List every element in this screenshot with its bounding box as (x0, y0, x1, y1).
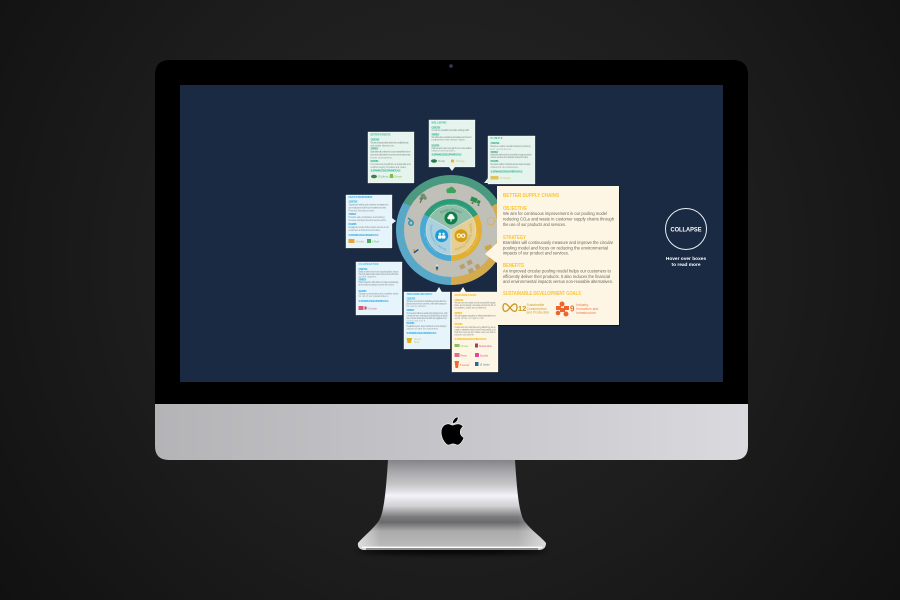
panel: better farming: Our customers benefit from a sustainable and (370, 163, 411, 166)
panel: better farming: forest ecosystems. (370, 156, 393, 160)
panel: zero harm and safety: Healthier teams, fewer incidents and a stronger (406, 325, 447, 328)
benefits block (503, 263, 613, 284)
panel: communities lower left: Stronger communities and a resilient sector (358, 292, 399, 296)
panel: zero harm and safety: for every worker. (406, 305, 427, 308)
panel: communities lower left: Work together with others to share knowledge (358, 281, 399, 284)
icon: tree (447, 214, 455, 222)
sdg 12: and Production (526, 311, 549, 315)
panel: zero harm and safety: Achieve a zero-harm workplace across all of our (406, 300, 447, 303)
objective block: OBJECTIVE (503, 206, 527, 212)
panel: zero harm and safety: site, and we share lessons with our suppliers and (406, 317, 447, 320)
sdg 9: Infrastructure (576, 311, 596, 315)
benefits block: efficiently deliver their products. It also reduces the financial (503, 274, 610, 279)
sdg icons: 7 Energy (456, 160, 466, 163)
panel: better farming: SUSTAINABLE DEVELOPMENT GOALS (370, 170, 401, 172)
camera (449, 64, 453, 68)
outer ring: green (407, 179, 495, 204)
panel: responsible sourcing: that their own supply chains carry less risk to (454, 331, 496, 334)
sdg icon: Decent (414, 338, 422, 341)
sdg icons (454, 344, 492, 368)
ring labels: Sustainable Forests · Wellbeing · Climate (434, 203, 468, 210)
panel: better climate right: OBJECTIVE (490, 142, 500, 145)
sector: better supply chains: Better Supply Chains (455, 224, 472, 250)
sdg icons: Climate (460, 345, 469, 348)
hint text: Hover over boxes (666, 256, 706, 262)
icon: teal gear (408, 218, 413, 225)
objective block: the use of our products and services. (503, 222, 566, 227)
panel: zero harm and safety: OBJECTIVE (406, 298, 416, 300)
panel: better farming: BETTER FORESTS (370, 134, 391, 136)
panel: responsible sourcing: We aim for zero waste and a responsible supply (454, 302, 496, 304)
icon: linked gears (457, 234, 465, 237)
sdg icons: 3 Health (356, 240, 365, 244)
panel heading: BETTER SUPPLY CHAINS (503, 193, 559, 199)
panel: better farming (368, 132, 415, 184)
panel: healthy environment: Engaged people deliver better service to all (348, 226, 389, 229)
panel: better climate: Our aim is a healthier and safer working world. (432, 129, 470, 132)
panel: better farming: STRATEGY (370, 148, 379, 150)
sdg 12: 12 (518, 304, 526, 313)
icon: person (436, 264, 438, 271)
panel: better climate: Partners and customers gain from a more resilient (432, 147, 472, 150)
panel: better farming: certified supply of pallets and crates. (370, 166, 407, 169)
panel: responsible sourcing: STRATEGY (454, 312, 463, 315)
panel: healthy environment: OBJECTIVE (348, 200, 358, 204)
panel: better farming: OBJECTIVE (370, 138, 380, 142)
panel: better climate: BENEFITS (432, 144, 440, 148)
panel: healthy environment: Promote diversity at work. (348, 210, 375, 212)
icon: truck (470, 196, 481, 206)
panel: healthy environment: Support a healthy and inclusive workplace for (348, 204, 389, 206)
icon: dotted cycle (487, 217, 495, 225)
wheel diagram (396, 175, 497, 285)
outer ring: yellow (451, 204, 502, 281)
benefits block: An improved circular pooling model helps our customers to (503, 268, 611, 274)
sdg 12: Consumption (526, 307, 547, 311)
icon: apple logo (441, 417, 464, 445)
sdg 9 (556, 302, 598, 316)
panel: better farming: and work with partners to protect and regenerate (370, 154, 411, 156)
sdg icons (431, 159, 466, 163)
panel: responsible sourcing: base, and to design out waste across the life of (454, 304, 496, 307)
panel: healthy environment: SUSTAINABLE DEVELOPMENT GOALS (348, 234, 379, 237)
panel: zero harm and safety: ZERO HARM AND SAFETY (406, 293, 433, 296)
strategy block: STRATEGY (503, 235, 526, 241)
panel: communities lower left: BENEFITS (358, 290, 367, 293)
panel: better climate: OBJECTIVE (432, 126, 441, 130)
panel: better climate: We will reduce emissions and waste and invest in (432, 136, 472, 139)
panel: zero harm and safety: SUSTAINABLE DEVELOPMENT GOALS (406, 332, 437, 335)
benefits block: and environmental impacts versus non-reusable alternatives. (503, 279, 613, 284)
sdg icon: Work (414, 341, 420, 344)
monitor chin (155, 404, 748, 460)
panel: communities lower left (356, 262, 403, 316)
panel pointer (485, 243, 497, 263)
panel: better climate right (484, 136, 536, 185)
panel: better farming: and replant what we use. (370, 144, 395, 148)
panel: healthy environment: our employees and the communities we serve. (348, 206, 387, 210)
objective block (503, 206, 614, 227)
sdg icon: 13 Climate (500, 177, 511, 180)
outer ring: blue (400, 204, 451, 281)
panel: better farming: BENEFITS (370, 160, 379, 163)
hint text (666, 256, 706, 268)
strategy block: impacts of our product and services. (503, 250, 569, 256)
panel: better climate right: our emissions. (490, 148, 513, 151)
icon: pallets (459, 259, 480, 274)
objective block: reducing CO₂e and waste in customer supply chains through (503, 216, 614, 222)
sdg 9: Industry, (576, 303, 589, 307)
panel: better climate right: SUSTAINABLE DEVELOPMENT GOALS (490, 170, 523, 174)
panel: communities lower left: across regions. (358, 276, 377, 278)
screen (180, 85, 723, 382)
panel: responsible sourcing: OBJECTIVE (454, 299, 464, 302)
sector: better communities: Better Communities (430, 224, 446, 251)
sdg icons: Equality (480, 354, 489, 358)
panel: zero harm and safety: BENEFITS (406, 322, 415, 325)
ring labels: Circular Pooling · Logistics (466, 233, 478, 252)
sdg icons: Climate (394, 176, 403, 178)
panel: better climate: WELLBEING (432, 122, 447, 124)
sdg icons: Peace (460, 356, 468, 358)
panel: communities lower left: STRATEGY (358, 278, 367, 282)
sdg icon: 5 Gender (368, 308, 377, 310)
panel: healthy environment: Provide safe workplaces and training (348, 216, 385, 219)
icon: worker (413, 249, 419, 253)
collapse button (666, 208, 706, 250)
panel: better climate: shared environment. (432, 150, 456, 152)
panel: communities lower left: OBJECTIVE (358, 268, 368, 271)
sector: better planet: Better Planet (440, 208, 462, 214)
sdg icons: 8 Work (372, 240, 380, 244)
panel: zero harm and safety: measurement, training and leadership at each (406, 314, 448, 318)
strategy block: pooling model and focus on reducing the environmental (503, 246, 608, 250)
panel: better climate right: chains for our customers. (490, 166, 519, 169)
panel: better climate: programmes that restore nature. (432, 138, 466, 142)
panel: healthy environment: STRATEGY (348, 213, 357, 216)
panel: better climate: SUSTAINABLE DEVELOPMENT GOALS (432, 154, 462, 156)
panel: better climate right: STRATEGY (490, 151, 499, 154)
collapse button: COLLAPSE (670, 226, 702, 234)
panel: responsible sourcing: made, maintained and moved responsibly, and (454, 328, 496, 332)
sdg 9: Innovation and (576, 307, 598, 311)
panel: better climate (429, 120, 476, 171)
sdg icons: 5 Gender (460, 364, 470, 367)
panel: healthy environment: for every employee at every service centre. (348, 219, 387, 222)
panel: better climate: STRATEGY (432, 134, 440, 136)
panel: responsible sourcing: RESPONSIBLE WORK (454, 294, 477, 297)
sdg icons: Responsible (479, 346, 492, 348)
inner ring: green (427, 202, 475, 216)
sdg icons: 15 Life (438, 161, 446, 163)
panel: zero harm and safety: contractors. (406, 320, 427, 322)
panel: better climate right: Reduces carbon footprint across shared supply (490, 163, 531, 166)
panel: communities lower left: SUSTAINABLE DEVELOPMENT GOALS (358, 300, 389, 303)
sdg icon (406, 338, 422, 344)
strategy block (503, 235, 613, 256)
panel: healthy environment (346, 195, 396, 249)
panel: better farming: We aim to source all our timber from certified forests (370, 142, 409, 144)
hint text: to read more (671, 262, 701, 268)
sdg icons (348, 239, 380, 244)
panel: responsible sourcing: SUSTAINABLE DEVELOPMENT GOALS (454, 338, 487, 341)
panel: communities lower left: CO-OPERATION (358, 263, 379, 266)
benefits block: BENEFITS (503, 263, 524, 269)
panel: better climate right: CLIMATE (490, 137, 503, 140)
grey ring (399, 178, 503, 282)
panel: responsible sourcing: We will engage suppliers on ethical standards and (454, 314, 496, 318)
panel: communities lower left: through partnerships with customers and NGOs (358, 273, 399, 276)
ring labels: Local Communities · Safety (424, 232, 437, 253)
inner ring: blue (423, 216, 451, 258)
sdg 12: Sustainable (526, 303, 544, 307)
sdg 12 (503, 303, 549, 315)
panel: better climate right: service centres and optimise transport routes. (490, 156, 529, 159)
sdg icons: 15 Life on Land (378, 176, 395, 178)
strategy block: Brambles will continuously measure and improve the circular (503, 240, 613, 245)
panel: better climate right: Brambles will invest in renewable energy across its (490, 154, 532, 156)
ring labels (424, 203, 478, 253)
objective block: We aim for continuous improvement in our pooling model (503, 211, 607, 216)
sdg icons (371, 174, 403, 178)
sdg heading: SUSTAINABLE DEVELOPMENT GOALS (503, 291, 581, 297)
panel: better supply chains detail (485, 186, 620, 326)
icon: forest tree (419, 194, 427, 203)
icon: cloud (446, 187, 456, 193)
panel: responsible sourcing: audit those at higher risk. (454, 317, 485, 320)
panel: zero harm and safety (404, 287, 451, 350)
panel: zero harm and safety: STRATEGY (406, 309, 415, 312)
panel: better farming: Brambles will continue to source sustainable timber (370, 150, 411, 154)
panel: communities lower left: Build a safer and more equal logistics sector (358, 270, 399, 274)
panel: responsible sourcing: Customers can trust that every pallet they use is (454, 326, 496, 329)
panel: zero harm and safety: plants and service centres, with safe transport (406, 302, 447, 306)
panel: better climate right: BENEFITS (490, 160, 499, 163)
panel: healthy environment: HEALTHY ENVIRONMENT (348, 196, 373, 199)
panel: communities lower left: and improve practice across the sector. (358, 284, 395, 286)
panel: zero harm and safety: culture of care for customers. (406, 328, 439, 330)
sdg icons: 16 Justice (480, 364, 491, 366)
panel: responsible sourcing (452, 287, 499, 373)
panel: responsible sourcing: BENEFITS (454, 323, 463, 326)
panel: healthy environment: BENEFITS (348, 223, 357, 226)
icon: yellow crate (484, 244, 492, 251)
icon: people (438, 233, 445, 239)
sdg 9: 9 (570, 304, 575, 314)
panel: responsible sourcing: our pallets, crates and containers. (454, 306, 487, 310)
panel: zero harm and safety: Our people follow a safety-first programme, with (406, 312, 448, 315)
panel: better climate right: Become a carbon-neutral business by reducing (490, 145, 531, 148)
monitor stand (356, 460, 548, 554)
inner ring: yellow (451, 216, 479, 258)
monitor body (155, 60, 748, 460)
panel: communities lower left: for all of our stakeholders. (358, 295, 389, 298)
panel: responsible sourcing: people and planet. (454, 334, 475, 336)
panel: healthy environment: customers and local communities. (348, 229, 381, 232)
